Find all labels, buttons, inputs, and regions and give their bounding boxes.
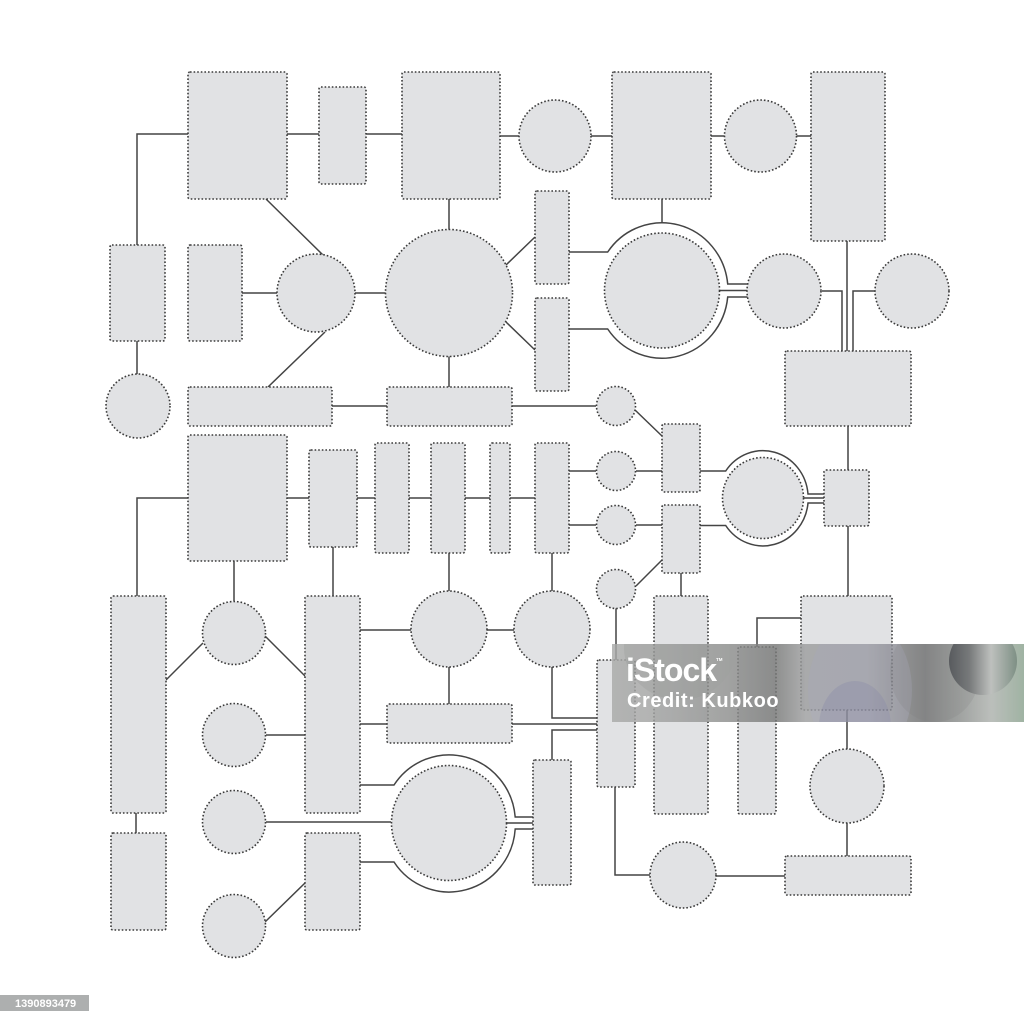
top row circle 1 <box>519 100 591 172</box>
square box <box>824 470 869 526</box>
top row circle 2 <box>724 100 796 172</box>
left box <box>110 245 165 341</box>
small box lower <box>662 505 700 573</box>
wide bar centre <box>387 387 512 426</box>
lower circle 2 <box>514 591 590 667</box>
circle right of ring <box>747 254 821 328</box>
right box <box>801 596 892 710</box>
small circle d <box>596 570 636 608</box>
image id tag: 1390893479 <box>15 998 76 1010</box>
large central circle <box>386 230 512 356</box>
ringed circle middle <box>722 458 804 538</box>
flowchart nodes <box>106 72 949 958</box>
mid row large box <box>188 435 287 561</box>
left column circle 2 <box>202 704 266 766</box>
wide box right <box>785 351 911 426</box>
top row box 1 <box>188 72 287 199</box>
ringed circle lower <box>392 766 506 880</box>
lower left short box <box>111 833 166 930</box>
tall box right a <box>654 596 708 814</box>
left column circle 3 <box>202 790 266 854</box>
right circle <box>810 749 884 823</box>
top row box 4 <box>612 72 711 199</box>
small circle c <box>596 506 636 544</box>
left small circle <box>106 374 170 438</box>
tall box right b <box>738 647 776 814</box>
lower short box <box>305 833 360 930</box>
small box upper <box>662 424 700 492</box>
top row box 3 <box>402 72 500 199</box>
ring: middle right <box>700 451 824 546</box>
connector lines <box>136 134 875 922</box>
trademark: TM <box>716 657 723 662</box>
box beside left box <box>188 245 242 341</box>
lower circle 1 <box>411 591 487 667</box>
top row tall box <box>811 72 885 241</box>
lower tall box <box>305 596 360 813</box>
lower wide bar <box>387 704 512 743</box>
junction tall box <box>597 660 635 787</box>
bottom wide bar <box>785 856 911 895</box>
top row box 2 <box>319 87 366 184</box>
mid row strip 4 <box>535 443 569 553</box>
left column circle 1 <box>202 602 266 664</box>
far right circle <box>875 254 949 328</box>
watermark logo: iStock <box>626 652 717 688</box>
medium circle <box>277 254 355 332</box>
narrow box lower <box>535 298 569 391</box>
wide bar left <box>188 387 332 426</box>
mid row strip 1 <box>375 443 409 553</box>
mid row strip 3 <box>490 443 510 553</box>
watermark credit: Credit: Kubkoo <box>627 690 779 712</box>
left column circle 4 <box>202 894 266 958</box>
small circle b <box>596 452 636 490</box>
box right of lower ring <box>533 760 571 885</box>
mid row box <box>309 450 357 547</box>
image id tag <box>0 995 89 1011</box>
ring: upper centre <box>569 223 748 358</box>
lower left tall box <box>111 596 166 813</box>
watermark band <box>612 596 1024 773</box>
narrow box upper <box>535 191 569 284</box>
ring: lower centre <box>360 755 533 892</box>
bottom circle <box>650 842 716 908</box>
small circle a <box>596 386 636 426</box>
mid row strip 2 <box>431 443 465 553</box>
ringed circle upper <box>604 233 720 348</box>
